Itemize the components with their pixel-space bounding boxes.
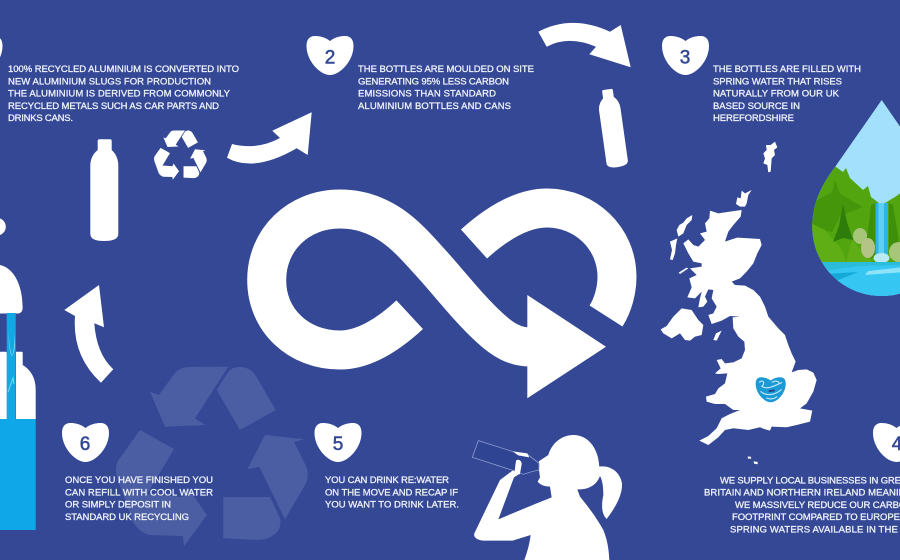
- water drop illustration: [812, 100, 900, 296]
- text: step 2 description: THE BOTTLES ARE MOULDED ON SITE: [358, 64, 534, 75]
- text: step 6 description: OR SIMPLY DEPOSIT IN: [65, 500, 171, 511]
- infinity arrow: [267, 208, 617, 398]
- text: step 3 description: THE BOTTLES ARE FILLED WITH: [713, 64, 861, 75]
- text: step 4 description: [704, 476, 900, 536]
- text: step 6 description: STANDARD UK RECYCLING: [65, 512, 189, 523]
- step 5 badge: 5: [333, 434, 343, 455]
- text: step 2 description: ALUMINIUM BOTTLES AND CANS: [358, 101, 511, 112]
- icon: large faded recycling symbol: [116, 367, 308, 546]
- text: step 5 description: ON THE MOVE AND RECAP IF: [325, 487, 458, 498]
- text: step 2 description: GENERATING 95% LESS CARBON: [358, 76, 509, 88]
- step 4 badge: [873, 423, 900, 462]
- text: step 3 description: NATURALLY FROM OUR UK: [713, 89, 840, 100]
- UK map: [661, 142, 817, 464]
- arrow: step 6 to step 1: [64, 285, 113, 383]
- text: step 3 description: BASED SOURCE IN: [713, 101, 800, 112]
- text: step 2 description: EMISSIONS THAN STANDARD: [358, 89, 496, 100]
- text: step 3 description: SPRING WATER THAT RISES: [713, 76, 842, 88]
- text: step 5 description: YOU CAN DRINK RE:WATER: [325, 475, 449, 486]
- refill station illustration: [0, 218, 36, 530]
- step 6 badge: 6: [80, 434, 90, 455]
- icon: source heart on map: [756, 377, 786, 402]
- step 3 badge: 3: [680, 47, 690, 68]
- arrow: step 2 to step 3: [538, 23, 631, 67]
- step 6 badge: [62, 423, 109, 462]
- step 2 badge: [306, 36, 354, 75]
- arrow: step 1 to step 2: [227, 112, 312, 164]
- icon: upright aluminium bottle: [90, 139, 118, 241]
- text: step 3 description: [713, 64, 861, 124]
- woman drinking silhouette: [472, 435, 622, 560]
- icon: step 1 heart badge: [0, 36, 2, 75]
- icon: tilted bottle: [596, 88, 629, 169]
- text: step 2 description: [358, 64, 534, 112]
- text: step 1 description: RECYCLED METALS SUCH AS CAR PARTS AND: [8, 101, 219, 112]
- text: step 6 description: ONCE YOU HAVE FINISHED YOU: [65, 475, 213, 486]
- text: step 3 description: HEREFORDSHIRE: [713, 113, 794, 124]
- text: step 6 description: [65, 475, 213, 523]
- text: step 1 description: DRINKS CANS.: [8, 113, 73, 124]
- text: step 1 description: THE ALUMINIUM IS DERIVED FROM COMMONLY: [8, 88, 231, 100]
- text: step 1 description: 100% RECYCLED ALUMINIUM IS CONVERTED INTO: [8, 64, 239, 75]
- icon: small recycling symbol: [154, 130, 207, 180]
- text: step 1 description: [8, 64, 239, 124]
- text: step 5 description: YOU WANT TO DRINK LATER.: [325, 500, 459, 511]
- step 5 badge: [314, 423, 362, 462]
- step 3 badge: [662, 36, 709, 75]
- text: step 5 description: [325, 475, 459, 511]
- text: step 1 description: NEW ALUMINIUM SLUGS FOR PRODUCTION: [8, 76, 211, 87]
- step 2 badge: 2: [325, 47, 335, 68]
- text: step 6 description: CAN REFILL WITH COOL WATER: [65, 487, 213, 498]
